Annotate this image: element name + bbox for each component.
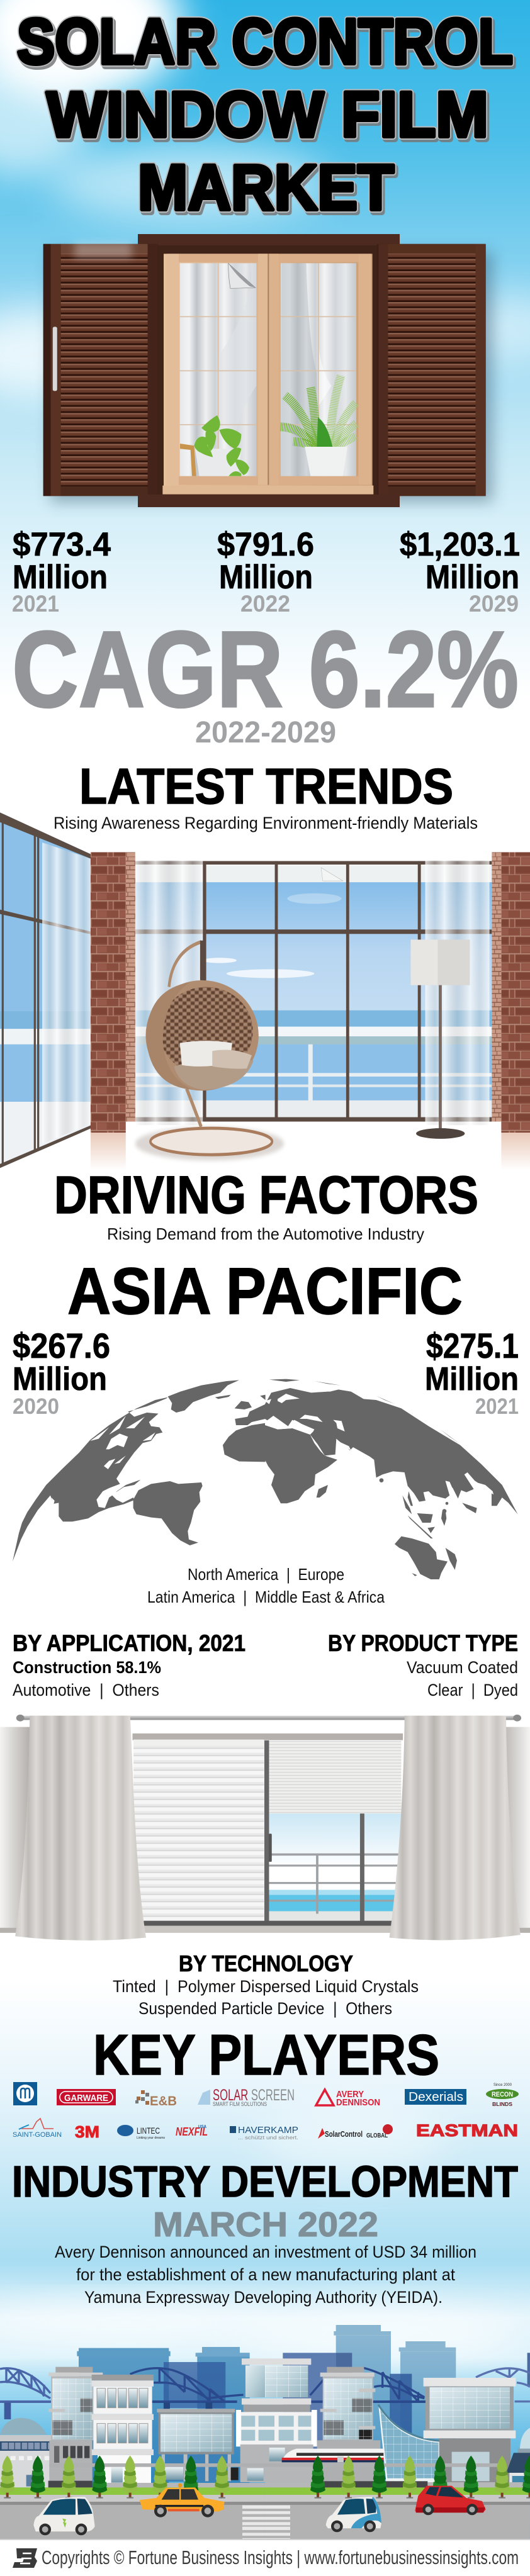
icon: yellow taxi: [140, 2484, 225, 2517]
segment: by product type: Clear | Dyed: [427, 1681, 518, 1700]
other regions: Latin America | Middle East & Africa: [147, 1588, 385, 1606]
title: WINDOW FILM: [48, 81, 490, 153]
elevated rail: [49, 2463, 265, 2467]
illustration: cityscape: [0, 2325, 530, 2539]
stat: Asia Pacific 2021: 2021: [475, 1394, 519, 1419]
white tower: [92, 2375, 154, 2484]
heading: driving factors: DRIVING FACTORS: [54, 1165, 478, 1224]
dome building: [0, 2418, 54, 2487]
stat: Asia Pacific 2021: Million: [425, 1361, 519, 1397]
latest trends text: Rising Awareness Regarding Environment-friendly Materials: [54, 814, 478, 832]
logo: Dexerials: Dexerials: [409, 2090, 463, 2104]
logo: Recon Blinds: BLINDS: [492, 2102, 513, 2107]
cityscape left half: [0, 2347, 265, 2539]
door frame and sill: [135, 1740, 402, 1933]
right dome house: [506, 2428, 530, 2486]
logo: SolarControl Global: GLOBAL: [366, 2132, 388, 2139]
bridge: [310, 2368, 530, 2403]
illustration: room with sea view: [0, 812, 530, 1170]
map: eastern hemisphere: [265, 1379, 518, 1579]
back window view: [135, 865, 492, 1119]
right shutter: [377, 244, 486, 496]
logo: Avery Dennison: AVERY: [336, 2089, 364, 2100]
segment: by technology: Suspended Particle Device | Others: [138, 1999, 392, 2018]
segment: by application: [13, 1630, 245, 1700]
logo: Lintec: [117, 2125, 165, 2140]
segment: by technology: [113, 1951, 419, 2018]
ground and steps: [0, 2481, 265, 2539]
title: MARKET: [138, 152, 394, 223]
development text: Avery Dennison announced an investment of USD 34 million: [55, 2243, 476, 2261]
logo: Madico: [13, 2082, 37, 2105]
stat: 2029: 2029: [469, 591, 519, 617]
other regions: [147, 1565, 385, 1606]
illustration: window with shutters: [43, 234, 493, 507]
logo: Garware: [57, 2089, 116, 2105]
elevated rail: [265, 2463, 506, 2467]
central building right part: [265, 2358, 317, 2482]
icon: white electric car: [33, 2497, 95, 2535]
ground and steps: [265, 2481, 530, 2539]
background: top sky: [0, 0, 530, 698]
logo: Fortune Business Insights: [13, 2548, 37, 2568]
segment: by technology: BY TECHNOLOGY: [179, 1951, 353, 1976]
window glass with drapes: [180, 263, 356, 476]
segment: by application: Automotive | Others: [13, 1681, 159, 1700]
icon: left plant: [180, 415, 249, 476]
development text: Yamuna Expressway Developing Authority (YEIDA).: [84, 2288, 443, 2307]
logo: Saint-Gobain: SAINT-GOBAIN: [13, 2131, 62, 2139]
right blinds: [269, 1741, 401, 1813]
title: MARKET: [138, 152, 394, 223]
central building left edge: [236, 2358, 265, 2482]
title: WINDOW FILM: [47, 79, 488, 150]
heading: key players: KEY PLAYERS: [93, 2024, 439, 2087]
train: [282, 2449, 383, 2462]
background: bottom sky: [0, 1982, 530, 2542]
brick column right: [492, 852, 530, 1170]
logo: Solar Screen: SMART FILM SOLUTIONS: [213, 2101, 267, 2107]
stat: Asia Pacific 2021: [425, 1326, 519, 1419]
right glass block: [424, 2378, 516, 2485]
stat: Asia Pacific 2020: $267.6: [13, 1326, 110, 1365]
lintel: [138, 234, 400, 249]
wall shading: [0, 1727, 530, 1933]
logo: Recon Blinds: RECON: [492, 2091, 513, 2098]
icon: floor lamp: [410, 939, 470, 1139]
logo: Lintec: Linking your dreams: [137, 2136, 165, 2140]
development date: MARCH 2022: [153, 2205, 378, 2244]
logo: Solar Screen: SOLAR SCREEN: [213, 2086, 295, 2104]
icon: red car: [415, 2486, 486, 2515]
background skyline: [77, 2347, 250, 2495]
logo: Solar Screen: [198, 2086, 295, 2107]
segment: by product type: Vacuum Coated: [407, 1658, 518, 1677]
left glazed wall: [0, 812, 91, 1168]
segment: by application: BY APPLICATION, 2021: [13, 1630, 245, 1656]
stat: Asia Pacific 2020: Million: [13, 1361, 107, 1397]
logo: E&B: [135, 2090, 177, 2108]
logo: Saint-Gobain: [13, 2119, 62, 2139]
glass tower: [48, 2367, 103, 2482]
stat: 2029: [400, 526, 520, 617]
logo: Nexfil: NEXFIL: [176, 2125, 208, 2138]
illustration: curtains and blinds window: [0, 1715, 530, 1940]
trees left: [0, 2456, 230, 2499]
map: western hemisphere: [13, 1380, 266, 1562]
logo: Nexfil: USA: [198, 2125, 206, 2129]
window frame top: [133, 1733, 403, 1740]
stat: 2022: Million: [219, 559, 313, 596]
logos: key players row one: [13, 2082, 519, 2108]
map: North America lakes and straits: [52, 1398, 168, 1505]
title: MARKET: [140, 154, 396, 226]
logo: Garware: GARWARE: [64, 2093, 108, 2103]
curved glass building: [378, 2405, 441, 2482]
stat: 2029: Million: [426, 559, 519, 596]
development text: [55, 2243, 476, 2307]
stat: 2021: $773.4: [13, 526, 111, 563]
left curtain: [15, 1716, 146, 1940]
background skyline: [283, 2325, 530, 2495]
window casing: [157, 245, 378, 497]
icon: blue white car: [326, 2497, 381, 2532]
brick column left: [91, 852, 135, 1170]
cityscape right half: [265, 2325, 530, 2539]
stat: 2021: [12, 526, 111, 617]
heading: asia pacific: ASIA PACIFIC: [67, 1255, 463, 1328]
logos: key players row two: [13, 2119, 518, 2141]
stat: Asia Pacific 2020: 2020: [13, 1394, 59, 1419]
left blinds: [133, 1740, 264, 1921]
window sill: [138, 495, 400, 507]
logo: Eastman: EASTMAN: [416, 2121, 518, 2140]
driving factors text: Rising Demand from the Automotive Industry: [107, 1224, 424, 1243]
map: world globe: [13, 1379, 518, 1579]
logo: Lintec: LINTEC: [137, 2125, 160, 2136]
sheer curtains: [135, 860, 490, 1125]
stat: 2022: 2022: [240, 591, 290, 617]
logo: SolarControl Global: [318, 2124, 393, 2139]
segment: by application: Construction 58.1%: [13, 1658, 161, 1677]
stat: 2029: $1,203.1: [400, 526, 520, 563]
footer: [0, 2539, 530, 2576]
logo: Haverkamp: ... schützt und sichert.: [238, 2135, 298, 2141]
stat: 2021: Million: [13, 559, 108, 596]
logo: 3M: 3M: [75, 2122, 99, 2141]
logo: E&B: E&B: [150, 2094, 177, 2108]
window frame: [162, 254, 373, 495]
window frame bars: [135, 861, 492, 1122]
segment: by product type: [328, 1630, 518, 1700]
stat: Asia Pacific 2020: [13, 1326, 110, 1419]
right curtain: [390, 1716, 521, 1940]
view through door: [269, 1813, 401, 1922]
wide glass building: [157, 2409, 239, 2482]
logo: Avery Dennison: [316, 2089, 380, 2108]
other regions: North America | Europe: [188, 1565, 344, 1584]
logo: Recon Blinds: Since 2000: [493, 2083, 512, 2087]
bridge: [0, 2368, 244, 2419]
stat: 2021: 2021: [12, 591, 59, 617]
logo: Haverkamp: HAVERKAMP: [238, 2125, 298, 2136]
stat: 2022: [217, 526, 314, 617]
icon: fern plant: [281, 376, 356, 476]
logo: Recon Blinds: [486, 2083, 519, 2107]
title: [17, 6, 515, 226]
title: WINDOW FILM: [47, 79, 488, 150]
left shutter: [43, 242, 158, 496]
trees right: [310, 2456, 530, 2499]
logo: Avery Dennison: DENNISON: [336, 2097, 380, 2108]
logo: SolarControl Global: SolarControl: [325, 2129, 363, 2139]
logo: Haverkamp: [230, 2125, 298, 2141]
icon: hanging chair: [135, 941, 284, 1160]
glass tower: [317, 2367, 380, 2482]
CAGR period: 2022-2029: [195, 716, 336, 749]
development text: for the establishment of a new manufacturing plant at: [76, 2265, 455, 2284]
map: inland seas: [265, 1394, 454, 1496]
segment: by technology: Tinted | Polymer Dispersed Liquid Crystals: [113, 1977, 419, 1996]
curtain rod: [16, 1715, 521, 1722]
heading: latest trends: LATEST TRENDS: [79, 758, 453, 814]
stat: 2022: $791.6: [217, 526, 314, 563]
